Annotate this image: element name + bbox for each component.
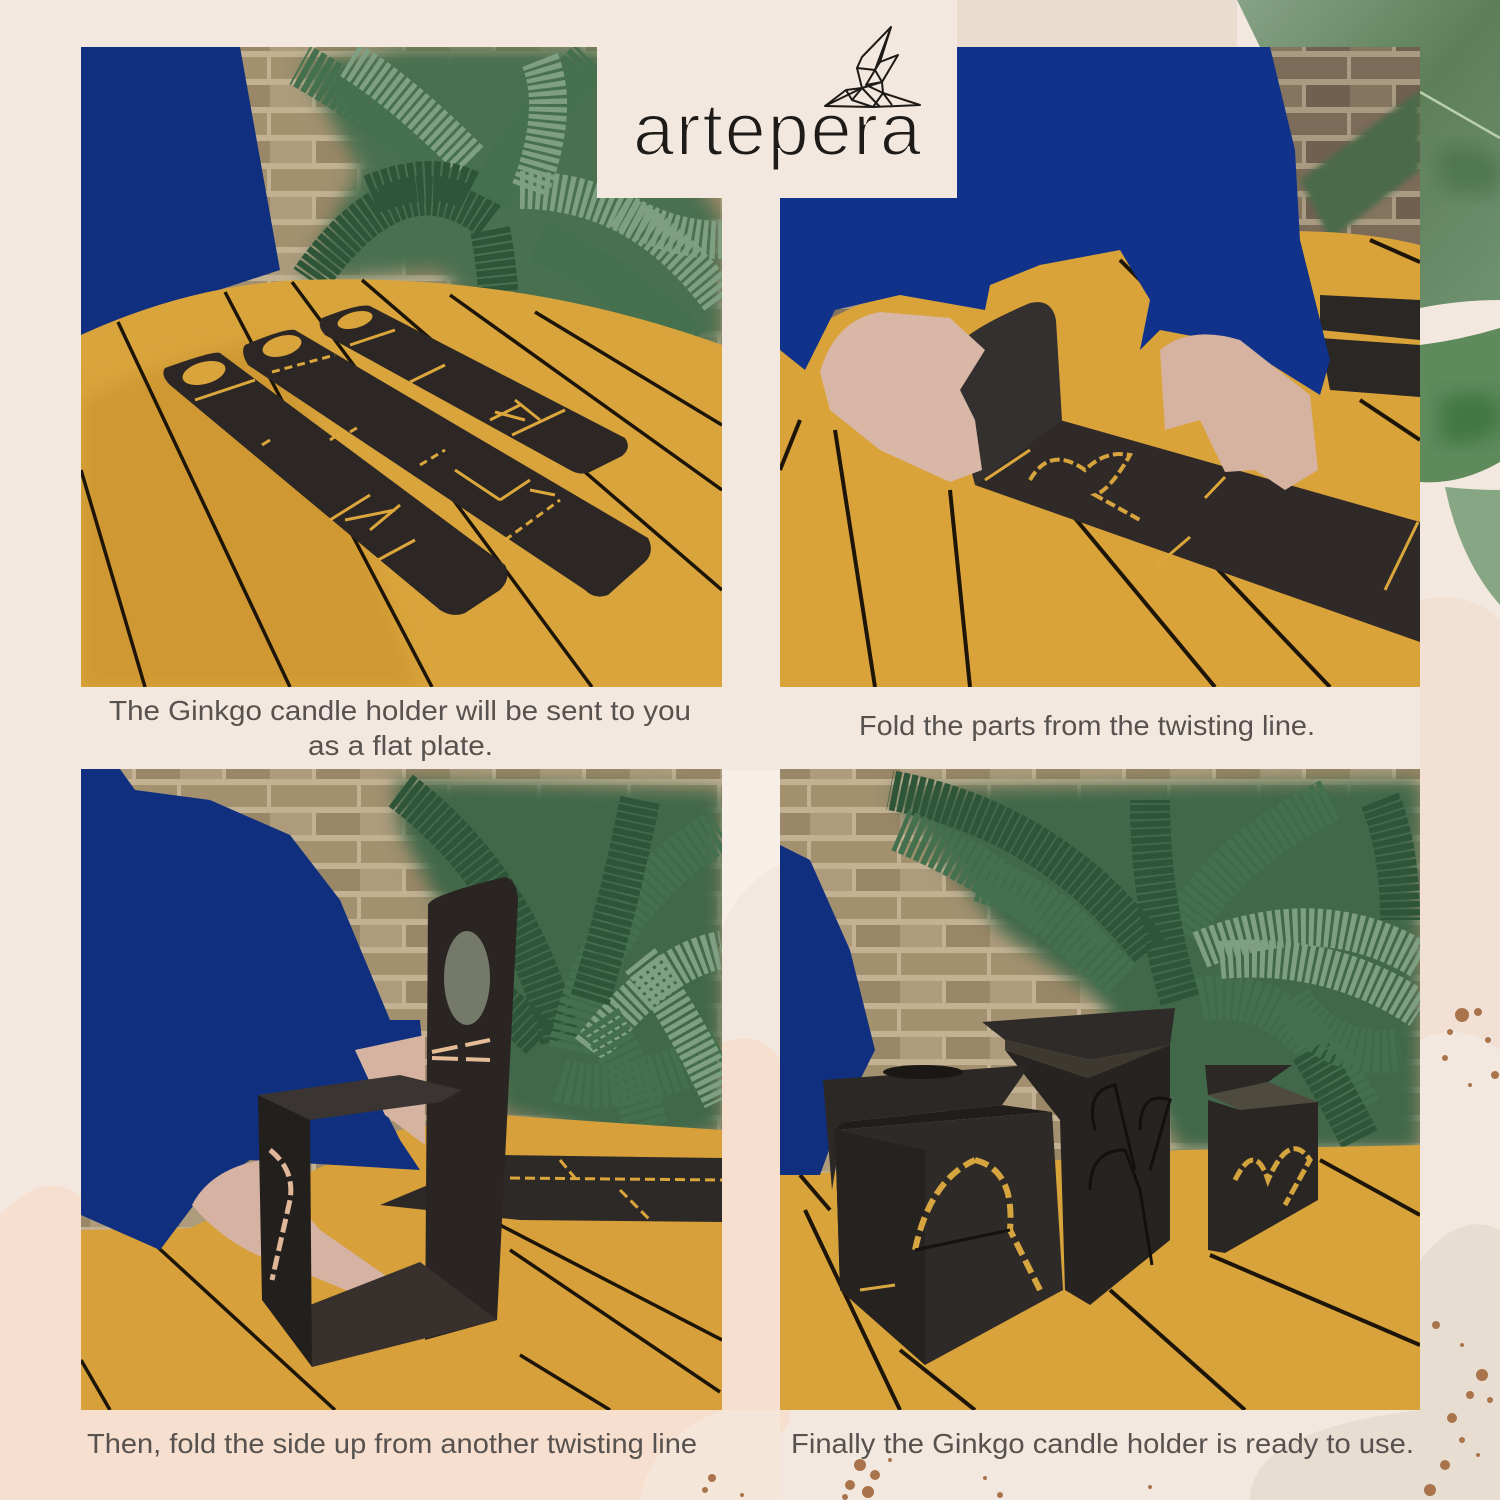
dark strips behind [1320, 295, 1420, 397]
right holder [1205, 1065, 1318, 1253]
hands [192, 1160, 392, 1298]
sweater [780, 47, 1330, 395]
left hand [820, 312, 985, 482]
logo panel [597, 0, 957, 198]
panel: step 1 flat plates photo [81, 47, 722, 687]
panel: step 4 finished holders photo [780, 769, 1420, 1410]
strip 2 [243, 330, 651, 597]
panel: step 3 fold side photo [81, 769, 722, 1410]
strip 3 [320, 306, 628, 474]
caption: step 4: Finally the Ginkgo candle holder is ready to use. [791, 1428, 1414, 1459]
right hand [1160, 334, 1318, 490]
centre holder [982, 1008, 1175, 1305]
logo wordmark: artepera [633, 88, 922, 171]
icon: fern plant [395, 780, 722, 1150]
caption: step 1 second line: as a flat plate. [308, 730, 493, 761]
decorative leaf top right [1237, 0, 1500, 605]
strip 1 [163, 353, 508, 615]
caption: step 3: Then, fold the side up from another twisting line [87, 1428, 697, 1459]
strip [975, 420, 1420, 642]
gold glitter [702, 1008, 1499, 1500]
folded flap [953, 302, 1062, 485]
holder [258, 877, 518, 1367]
icon: fern plant [890, 780, 1420, 1150]
sweater [81, 769, 425, 1250]
caption: step 2: Fold the parts from the twisting line. [859, 710, 1315, 741]
panel: step 2 fold photo [780, 47, 1420, 687]
sweater [780, 845, 875, 1175]
strip on table [380, 1155, 722, 1222]
icon: geometric bird [825, 27, 920, 107]
left holder [823, 1065, 1063, 1365]
caption: step 1: The Ginkgo candle holder will be sent to you [109, 695, 691, 726]
icon: fern plant [300, 47, 722, 345]
